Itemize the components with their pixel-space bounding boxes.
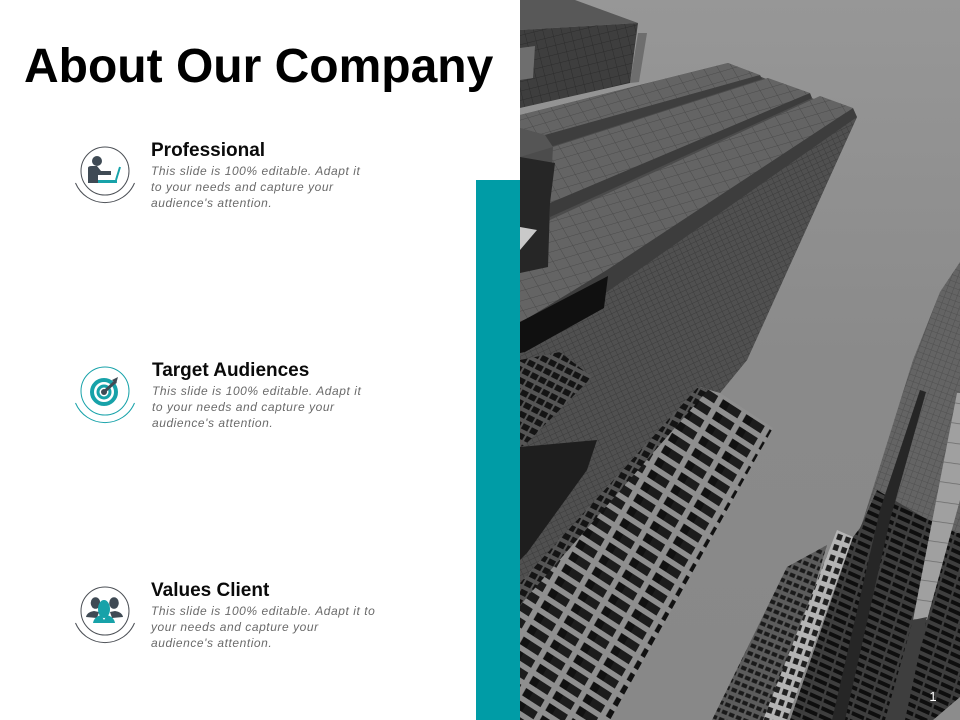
text block: Target Audiences [152, 360, 362, 430]
title: About Our Company [24, 40, 493, 93]
main glass tower [520, 63, 857, 583]
text block: Professional: Professional [151, 140, 265, 161]
text block: Values Client: your needs and capture your [151, 620, 319, 634]
text block: Target Audiences: Target Audiences [152, 360, 309, 381]
rear tower upper right [860, 262, 960, 720]
lower right buildings [712, 390, 960, 720]
text block: Professional: audience's attention. [151, 196, 272, 210]
icon: professional at laptop [75, 146, 135, 204]
teal vertical bar [476, 180, 520, 720]
rear block top left [520, 0, 647, 108]
icon: target with arrow [75, 366, 135, 424]
text block: Professional: to your needs and capture your [151, 180, 334, 194]
text block: Target Audiences: audience's attention. [152, 416, 273, 430]
text block: Values Client: audience's attention. [151, 636, 272, 650]
text block: Professional: This slide is 100% editable. Adapt it [151, 164, 360, 178]
page number: 1 [929, 689, 937, 704]
photo: skyscrapers viewed from below [520, 0, 960, 720]
text block: Values Client: This slide is 100% editable. Adapt it to [151, 604, 375, 618]
text block: Target Audiences: to your needs and capture your [152, 400, 335, 414]
icon: client group [75, 586, 135, 644]
text block: Values Client [150, 580, 375, 650]
text block: Values Client: Values Client [151, 580, 269, 601]
front building with white mullions [520, 387, 773, 720]
text block: Professional [151, 140, 360, 210]
text block: Target Audiences: This slide is 100% editable. Adapt it [152, 384, 361, 398]
